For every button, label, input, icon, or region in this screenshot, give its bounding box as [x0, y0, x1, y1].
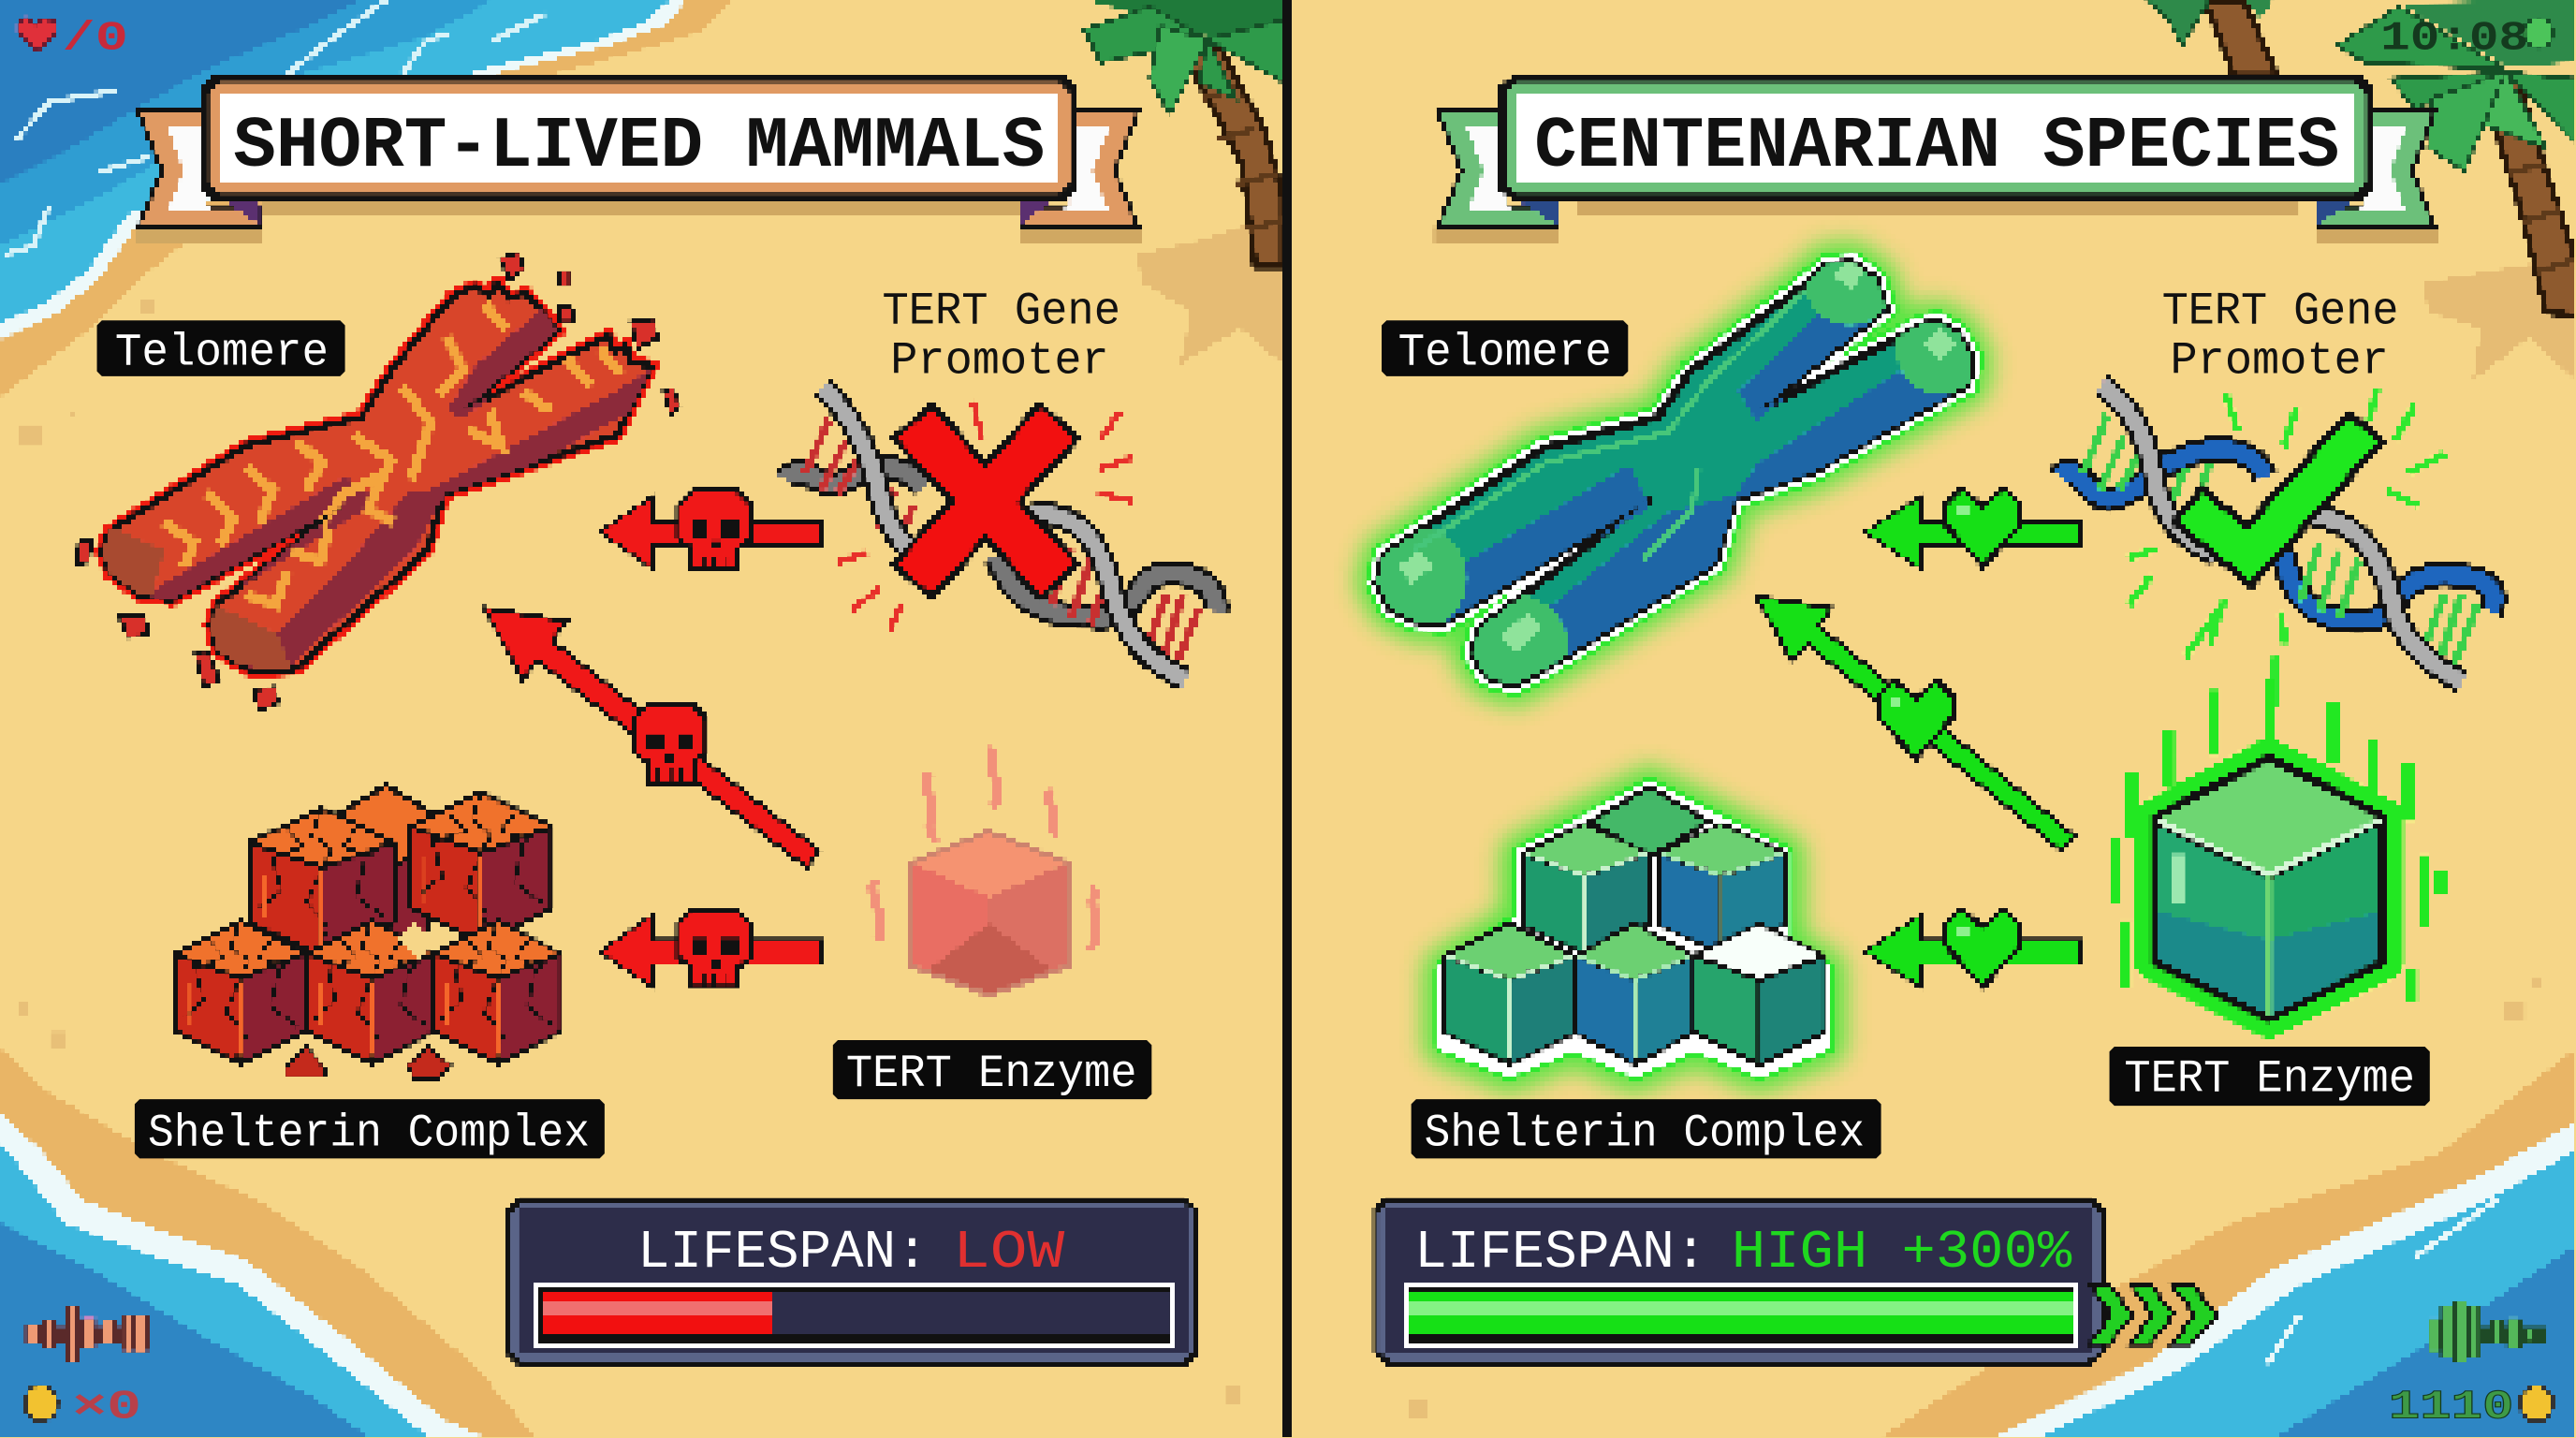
- ocean: top-left shoreline: [0, 0, 733, 398]
- label: telomere left: Telomere: [115, 327, 329, 379]
- arrow: tert enzyme to shelterin, green: [1865, 909, 2082, 988]
- arrow: tert gene to telomere: [600, 490, 822, 568]
- label: tert gene promoter right: Promoter: [2170, 334, 2389, 387]
- lifespan panel: low: [506, 1196, 1199, 1367]
- dna helix with green check: [2060, 385, 2494, 682]
- title: short-lived mammals: SHORT-LIVED MAMMALS: [233, 107, 1045, 188]
- hud icons: left: [18, 18, 151, 1421]
- progress chevrons: [2089, 1284, 2217, 1344]
- palm trees right panel: [2145, 0, 2576, 381]
- label: tert enzyme right: TERT Enzyme: [2124, 1052, 2415, 1105]
- palm tree left panel: [1084, 0, 1283, 365]
- glowing tert enzyme cube: [2116, 677, 2441, 1023]
- hud text: clock: 10:08: [2380, 16, 2528, 63]
- panel: short-lived mammals artwork: [0, 0, 1283, 1438]
- faded tert enzyme cube: [872, 748, 1097, 996]
- shelterin complex broken cubes: [174, 785, 562, 1078]
- value: high +300%: HIGH +300%: [1732, 1223, 2071, 1284]
- label: lifespan high: LIFESPAN:: [1414, 1223, 1707, 1284]
- ocean: bottom-right shoreline: [1880, 1049, 2576, 1438]
- title: centenarian species: CENTENARIAN SPECIES: [1534, 107, 2339, 188]
- panel: centenarian species artwork: [1365, 0, 2576, 1438]
- ocean: bottom-left shoreline: [0, 1049, 535, 1438]
- value: low: LOW: [953, 1223, 1065, 1284]
- label: tert gene promoter right: TERT Gene: [2162, 286, 2398, 338]
- hud icons: right: [2435, 18, 2553, 1421]
- arrow: tert enzyme to telomere: [485, 608, 820, 868]
- green check mark: [2128, 388, 2445, 707]
- arrow: tert gene to telomere, green: [1865, 488, 2082, 568]
- lifespan panel: high: [1373, 1196, 2104, 1367]
- arrow: tert enzyme to shelterin: [600, 909, 822, 988]
- label: tert gene promoter left: TERT Gene: [882, 286, 1120, 338]
- dna helix with red x: [785, 388, 1216, 681]
- label: tert gene promoter left: Promoter: [890, 334, 1109, 387]
- center divider: [1283, 0, 1293, 1438]
- arrow: tert enzyme to telomere, green: [1756, 596, 2075, 851]
- label: shelterin complex left: Shelterin Complex: [148, 1107, 590, 1159]
- chromosome: healthy telomere: [1365, 233, 1988, 703]
- shelterin complex healthy cubes: [1444, 787, 1825, 1071]
- label: tert gene promoter right: [2162, 286, 2398, 387]
- label: tert gene promoter left: [882, 286, 1120, 387]
- hud text: coins right: 1110: [2389, 1385, 2513, 1431]
- label: shelterin complex right: Shelterin Complex: [1425, 1107, 1865, 1159]
- label: telomere right: Telomere: [1398, 327, 1612, 379]
- label: lifespan low: LIFESPAN:: [637, 1223, 929, 1284]
- banner: centenarian species: [1434, 76, 2438, 243]
- hud text: lives: /0: [63, 16, 128, 63]
- hud text: coins left: ×0: [72, 1385, 141, 1431]
- chromosome: damaged telomere: [77, 253, 681, 710]
- label: tert enzyme left: TERT Enzyme: [846, 1048, 1137, 1100]
- banner: short-lived mammals: [135, 76, 1142, 243]
